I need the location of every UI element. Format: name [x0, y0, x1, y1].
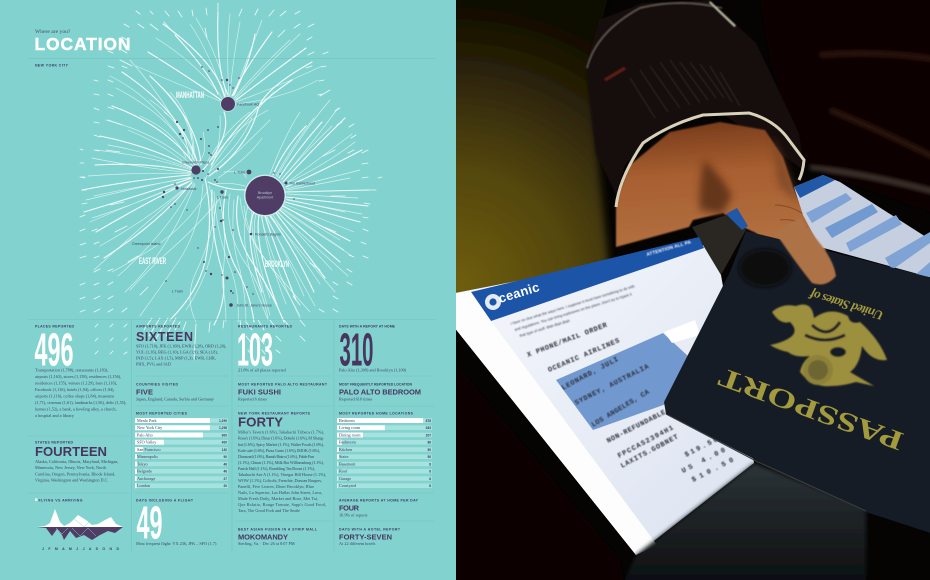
bar chart: most reported cities: 20	[223, 484, 227, 488]
stat: new york restaurants: Nails, La Superior, Las Hallas John Street, Lava,	[238, 490, 322, 496]
stat: countries visited: FIVE	[136, 388, 153, 396]
panel: location infographic	[0, 0, 456, 580]
bar chart: most reported cities: Palo Alto	[137, 432, 153, 438]
stat: airports reported: YUL (1,16), BEG (1,10), LGA (1,9), SEA (1,8),	[136, 350, 218, 356]
stat: best asian fusion: MOKOMANDY	[238, 532, 288, 542]
title block	[34, 29, 130, 68]
bar chart: home locations: Basement	[339, 462, 356, 466]
stat: places reported: PLACES REPORTED	[35, 324, 74, 328]
node: Brooklyn Apartment: Apartment	[257, 196, 273, 200]
stat: most frequent location: MOST FREQUENTLY REPORTED LOCATION	[339, 382, 412, 386]
stat: palo alto restaurant	[238, 382, 328, 402]
stat: new york restaurants: Parish Hall (1.1%), Rambling Tea Room (1.1%),	[238, 466, 315, 472]
stat: days at home: 310	[340, 324, 374, 376]
stat: days including a flight: 49	[136, 496, 162, 548]
stat: palo alto restaurant: FUKI SUSHI	[238, 388, 281, 396]
stat: new york restaurants: Takahachi Ave A (1.1%), Vinegar Hill House (1.1%),	[238, 472, 326, 478]
stat: new york restaurants: NEW YORK RESTAURANT REPORTS	[238, 412, 311, 416]
bar chart: most reported cities: 46	[223, 470, 227, 474]
map place labels: Ronald's Bagels	[255, 232, 281, 236]
panel base colour	[0, 0, 456, 580]
ticket printed text: NON-REFUNDABLE	[606, 409, 667, 446]
flow field map	[80, 3, 382, 360]
stat: average home reports	[339, 498, 419, 518]
stat: days at home: DAYS WITH A REPORT AT HOME	[339, 324, 396, 328]
bar chart: most reported cities: Tokyo	[137, 462, 148, 466]
stat: new york restaurants: Rosa's (1.6%), Dinar (1.6%), Dokebi (1.6%), M Shang-	[238, 436, 325, 442]
stat: restaurants reported: RESTAURANTS REPORTED	[238, 324, 292, 328]
ticket printed text: I have no clue what the ways here. I suppose it must have something to do with	[510, 284, 635, 326]
bar chart: home locations: 86	[427, 441, 431, 445]
stat: days including a flight: DAYS INCLUDING A FLIGHT	[136, 498, 194, 502]
stat: days including a flight	[136, 496, 217, 548]
stat: places reported: homes (1,52), a bank, a bowling alley, a church,	[35, 406, 117, 412]
map place labels: L Train	[172, 290, 183, 294]
bar chart: most reported cities: 400	[222, 441, 227, 445]
bar chart: most reported cities: SFO Valley	[137, 440, 157, 445]
stat: most frequent location: Reported 610 times	[339, 396, 373, 402]
bar chart: most reported cities: 90	[223, 455, 227, 459]
stat: airports reported: SFO (1,710), JFK (1,168), EWR (1,28), ORD (1,20),	[136, 344, 226, 350]
bar chart: most reported cities: San Francisco	[137, 447, 161, 452]
stat: best asian fusion: Sterling, Va. · Dec 26 at 8:07 PM	[238, 541, 295, 547]
bar chart: most reported cities: Menlo Park	[137, 418, 158, 423]
ticket printed text: OCEANIC AIRLINES	[547, 337, 621, 375]
grid rules	[28, 320, 436, 551]
stat: countries visited: Japan, England, Canada, Serbia and Germany	[136, 396, 215, 402]
header rule	[28, 58, 436, 60]
stat: airports reported: IND (1,5), LAX (1,5), MSP (1,3), EWR, LHR,	[136, 356, 216, 362]
passport cover lettering	[714, 286, 907, 457]
stat: most frequent location: PALO ALTO BEDROOM	[339, 388, 421, 396]
passport cover lettering: PASSPORT	[714, 362, 907, 457]
stat: new york restaurants: FORTY	[238, 416, 284, 430]
stat: average home reports: FOUR	[339, 504, 360, 512]
stat: states reported: Minnesota, New Jersey, New York, North	[35, 465, 107, 471]
stat: new york restaurants: Que Rolaito, Rouge Tomate, Sapp's Good Food,	[238, 502, 326, 508]
node: Brooklyn Apartment: Brooklyn	[258, 191, 272, 195]
wall background	[456, 0, 612, 293]
bar chart: home locations: 878	[426, 419, 431, 423]
ticket printed text: that type of stuff. Blah Blah Blah	[519, 319, 570, 338]
map area labels	[139, 90, 289, 269]
bar chart: home locations: Garage	[339, 476, 351, 481]
bar chart: home locations: Roof	[339, 469, 348, 474]
bar chart: most reported cities: Anchorage	[137, 476, 156, 481]
stat: airports reported: SIXTEEN	[136, 330, 193, 344]
bar chart: home locations: Kitchen	[339, 447, 353, 452]
title: LOCATION	[34, 34, 130, 54]
stat: states reported: STATES REPORTED	[35, 440, 73, 444]
panel: location infographic: BROOKLYN	[265, 259, 289, 269]
map place labels: Greenpoint Island	[132, 242, 160, 246]
stat: countries visited: COUNTRIES VISITED	[136, 382, 178, 386]
bar chart: most reported cities: MOST REPORTED CITIES	[136, 412, 188, 416]
map area labels: EAST RIVER	[139, 256, 166, 266]
hand	[615, 121, 828, 251]
bar chart: home locations	[337, 412, 432, 488]
map place labels	[132, 170, 315, 308]
bar chart: home locations: 8	[429, 484, 431, 488]
map place labels: L Train	[234, 170, 245, 174]
airline logo: ceanic	[496, 279, 541, 306]
ticket printed text: FPCCAS2394H1	[617, 424, 675, 461]
sleeve	[586, 0, 804, 195]
stat: palo alto restaurant: Reported 6 times	[238, 396, 267, 402]
small place dots	[162, 66, 295, 307]
bar chart: most reported cities: 46	[223, 462, 227, 466]
ticket printed text: ATTENTION ALL PA	[646, 239, 692, 257]
bar chart: home locations: Living room	[339, 425, 361, 430]
bar chart: home locations: 8	[429, 477, 431, 481]
stat: states reported: Virginia, Washington and Washington D.C.	[35, 478, 109, 484]
stat: places reported: Transportation (1,788), restaurants (1,183),	[35, 368, 108, 374]
stat: new york restaurants: Tara, The Good Fork and The Smile	[238, 508, 300, 514]
passport	[664, 231, 930, 536]
airline logo	[485, 284, 540, 310]
bar chart: most reported cities: Minneapolis	[137, 454, 158, 459]
photo: hand holding boarding pass and passport	[440, 0, 930, 580]
bar chart: home locations: Dining room	[339, 432, 361, 438]
bar chart: most reported cities: 900	[222, 434, 227, 438]
stat: hotel report days	[339, 528, 401, 546]
lower left shadow	[622, 578, 624, 580]
dark jacket body	[808, 48, 930, 196]
bar chart: home locations: 363	[426, 426, 431, 430]
chart: flying vs arriving: J F M A M J J A S O N D	[42, 547, 119, 551]
node: Brooklyn Apartment	[244, 174, 286, 216]
map nodes	[132, 66, 315, 308]
stat: hotel report days: DAYS WITH A HOTEL REPORT	[339, 528, 401, 532]
stat: new york restaurants: Kofe cafe (1.6%), Pizza Gusto (1.6%), IMOK (1.6%),	[238, 448, 320, 454]
ticket printed text: LOS ANGELES, CA	[590, 388, 652, 430]
ticket printed text: US 4.00	[681, 447, 727, 476]
stat: places reported: Facebook (1,116), hotels (1,94), offices (1,94),	[35, 387, 114, 393]
floor behind ticket	[620, 463, 866, 580]
stat: best asian fusion: BEST ASIAN FUSION IN A STRIP MALL	[238, 528, 318, 532]
ticket printed text: $10.50	[691, 457, 735, 485]
stat: places reported: residences (1,155), venues (1,129), bars (1,116),	[35, 380, 117, 386]
boarding pass	[450, 237, 754, 555]
stat: countries visited	[136, 382, 215, 402]
stat: restaurants reported: 103	[237, 324, 273, 376]
bar chart: most reported cities: 130	[222, 448, 227, 452]
bar chart: most reported cities: 1,299	[219, 419, 227, 423]
bar chart: home locations: 8	[429, 470, 431, 474]
city label: NEW YORK CITY	[35, 64, 69, 68]
node: Facebook HQ	[220, 96, 259, 112]
stat: most frequent location	[339, 382, 421, 402]
bar chart: home locations: 50	[427, 448, 431, 452]
stat: new york restaurants: WOW (1.1%), Colicchi, Frenchie, Duncan Burgers,	[238, 478, 322, 484]
bar chart: most reported cities: 27	[223, 477, 227, 481]
map area labels: MANHATTAN	[176, 90, 204, 100]
stat: hotel report days: At 22 different hotels	[339, 541, 376, 546]
map place labels: Notebook	[181, 187, 197, 191]
bar chart: most reported cities: New York City	[137, 425, 163, 430]
stat: states reported	[35, 440, 118, 484]
stat: days including a flight: Most frequent flight: VX 236, JFK – SFO (1.7)	[136, 541, 217, 547]
passport eagle emblem	[770, 304, 887, 386]
stat: average home reports: AVERAGE REPORTS AT HOME PER DAY	[339, 498, 419, 502]
stat: new york restaurants: hai (1.6%), Spicy Market (1.1%), Walter Foods (1.6%),	[238, 442, 324, 448]
bar chart: most reported cities	[135, 412, 228, 488]
bar chart: home locations: Bedroom	[339, 418, 355, 423]
stat: places reported: airports (1,163), stores (1,158), residences (1,156),	[35, 374, 121, 380]
map place labels: The Barberhood	[289, 182, 315, 186]
stat: days at home: Palo Alto (1,309) and Brooklyn (1,100)	[339, 368, 407, 374]
passport cover lettering: United States of	[806, 286, 885, 323]
ticket printed text: LEONARD, JULI	[561, 356, 620, 393]
node: Facebook HQ: Facebook HQ	[237, 102, 259, 106]
stat: places reported: a hospital and a library	[35, 413, 75, 418]
ticket printed text: SYDNEY, AUSTRALIA	[574, 363, 651, 408]
stat: restaurants reported: 21.8% of all places reported	[238, 368, 287, 372]
ticket printed text	[510, 239, 735, 485]
stat: new york restaurants	[238, 412, 326, 514]
stat: states reported: Carolina, Oregon, Pennsylvania, Rhode Island,	[35, 472, 115, 478]
map place labels: L Train	[217, 196, 228, 200]
bar chart: home locations: Stairs	[339, 454, 349, 459]
bar chart: most reported cities: London	[137, 483, 151, 488]
ticket printed text: and regulations. You can bring explosives on the plane. Don't try to hijack it	[514, 292, 632, 332]
second ticket	[794, 175, 930, 280]
stat: states reported: FOURTEEN	[35, 445, 107, 459]
bar chart: home locations: MOST REPORTED HOME LOCATIONS	[339, 412, 414, 416]
chart: flying vs arriving	[35, 498, 123, 551]
ticket printed text: $19.50	[684, 436, 719, 460]
bar chart: home locations: 50	[427, 455, 431, 459]
stat: airports reported: AIRPORTS REPORTED	[136, 324, 180, 328]
stat: new york restaurants: Miller's Tavern (1.6%), Takahachi Tribeca (1.7%),	[238, 430, 324, 436]
map place labels: John St. Jane's House	[236, 304, 272, 308]
shirt cuff	[616, 113, 804, 207]
stat: hotel report days: FORTY-SEVEN	[339, 532, 392, 542]
stat: new york restaurants: Diamond (1.6%), Banah Bistro (1.6%), Pable Pan	[238, 454, 315, 460]
stat: new york restaurants: Panelli, Five Leaves, Diner Brooklyn, Blue	[238, 484, 314, 490]
ticket underside	[692, 213, 746, 275]
node: Greenwich Plaza	[182, 160, 209, 175]
bar chart: home locations: Bathroom	[339, 440, 356, 445]
title kicker: Where are you?	[35, 29, 71, 35]
finger over passport	[775, 218, 836, 284]
stat: places reported: 496	[34, 324, 74, 376]
stat: airports reported	[136, 324, 226, 368]
bar chart: home locations: 8	[429, 462, 431, 466]
stat: new york restaurants: Made Fresh Daily, Market and Rose, Mei Tai,	[238, 496, 318, 502]
chart: flying vs arriving: FLYING VS ARRIVING	[38, 498, 83, 502]
bar chart: home locations: Courtyard	[339, 483, 357, 488]
bar chart: most reported cities: 1,298	[219, 426, 227, 430]
stat: airports reported: PHX, PVG and IAD	[136, 362, 171, 368]
ticket printed text: LAXITS.GOBNET	[620, 434, 680, 471]
stat: states reported: Alaska, California, Illinois, Maryland, Michigan,	[35, 459, 118, 465]
stat: places reported: airports (1,116), coffee shops (1,84), museums	[35, 394, 115, 400]
bar chart: most reported cities: Belgrade	[137, 469, 152, 474]
stat: average home reports: 16.9% of reports	[339, 512, 368, 518]
stat: best asian fusion	[238, 528, 318, 547]
stat: places reported: (1,71), cinemas (1,61), landmarks (1,56), delis (1,55),	[35, 400, 126, 406]
stat: palo alto restaurant: MOST REPORTED PALO ALTO RESTAURANT	[238, 382, 328, 386]
bar chart: home locations: 207	[426, 434, 431, 438]
stat: new york restaurants: (1.1%), Chinar (1.1%), Milk Bar Williamsburg (1.1%),	[238, 460, 324, 466]
ticket printed text: X PHONE/MAIL ORDER	[526, 322, 609, 360]
node: Greenwich Plaza: Greenwich Plaza	[182, 160, 209, 164]
stat: places reported	[34, 324, 126, 418]
